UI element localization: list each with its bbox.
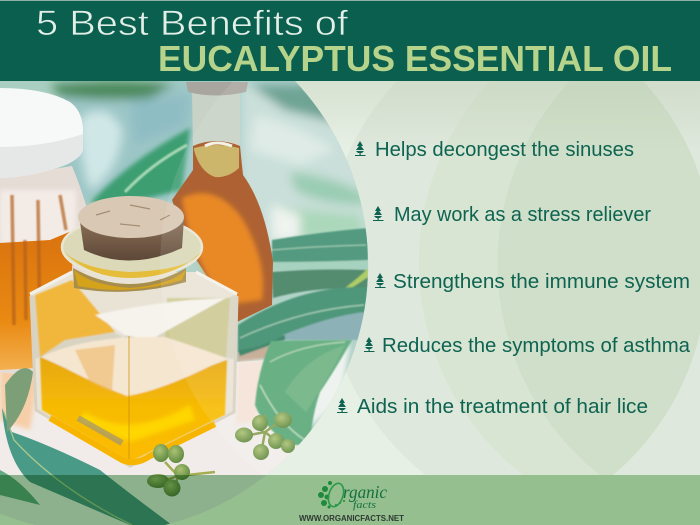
logo leaves [318,481,345,508]
title line 2: EUCALYPTUS ESSENTIAL OIL [158,38,672,79]
benefit 5: Aids in the treatment of hair lice [357,395,648,418]
logo: Organic Facts [299,481,405,523]
right panel background with overlapping circles [250,81,700,475]
title line 1: 5 Best Benefits of [36,3,348,43]
table surface [0,360,320,525]
photo: eucalyptus oil bottles and leaves [0,81,370,525]
cork stopper [78,196,184,261]
leaves on right of bottles [238,228,368,362]
faint overlapping circle washes over photo [160,81,368,475]
blurred leaf background [50,81,370,255]
website url: WWW.ORGANICFACTS.NET [299,513,405,523]
benefit 3: Strengthens the immune system [393,270,690,293]
benefit 4: Reduces the symptoms of asthma [382,334,691,357]
header band [0,0,700,81]
benefit 2: May work as a stress reliever [394,203,651,226]
benefit 1: Helps decongest the sinuses [375,138,634,161]
bottle neck and glass rim [62,217,202,292]
seed pods [147,412,295,496]
front bottle body [30,272,237,466]
footer band [0,475,700,525]
logo sub-word: facts [353,499,376,511]
lower right eucalyptus leaf [255,340,352,445]
large foreground leaf [0,368,172,525]
benefits list [337,138,691,418]
logo wordmark: rganic [343,482,387,502]
background bottle with amber oil [172,82,273,322]
logo letter O [326,481,346,509]
green blurred leaf [90,128,190,205]
left jar with white lid [0,88,91,374]
